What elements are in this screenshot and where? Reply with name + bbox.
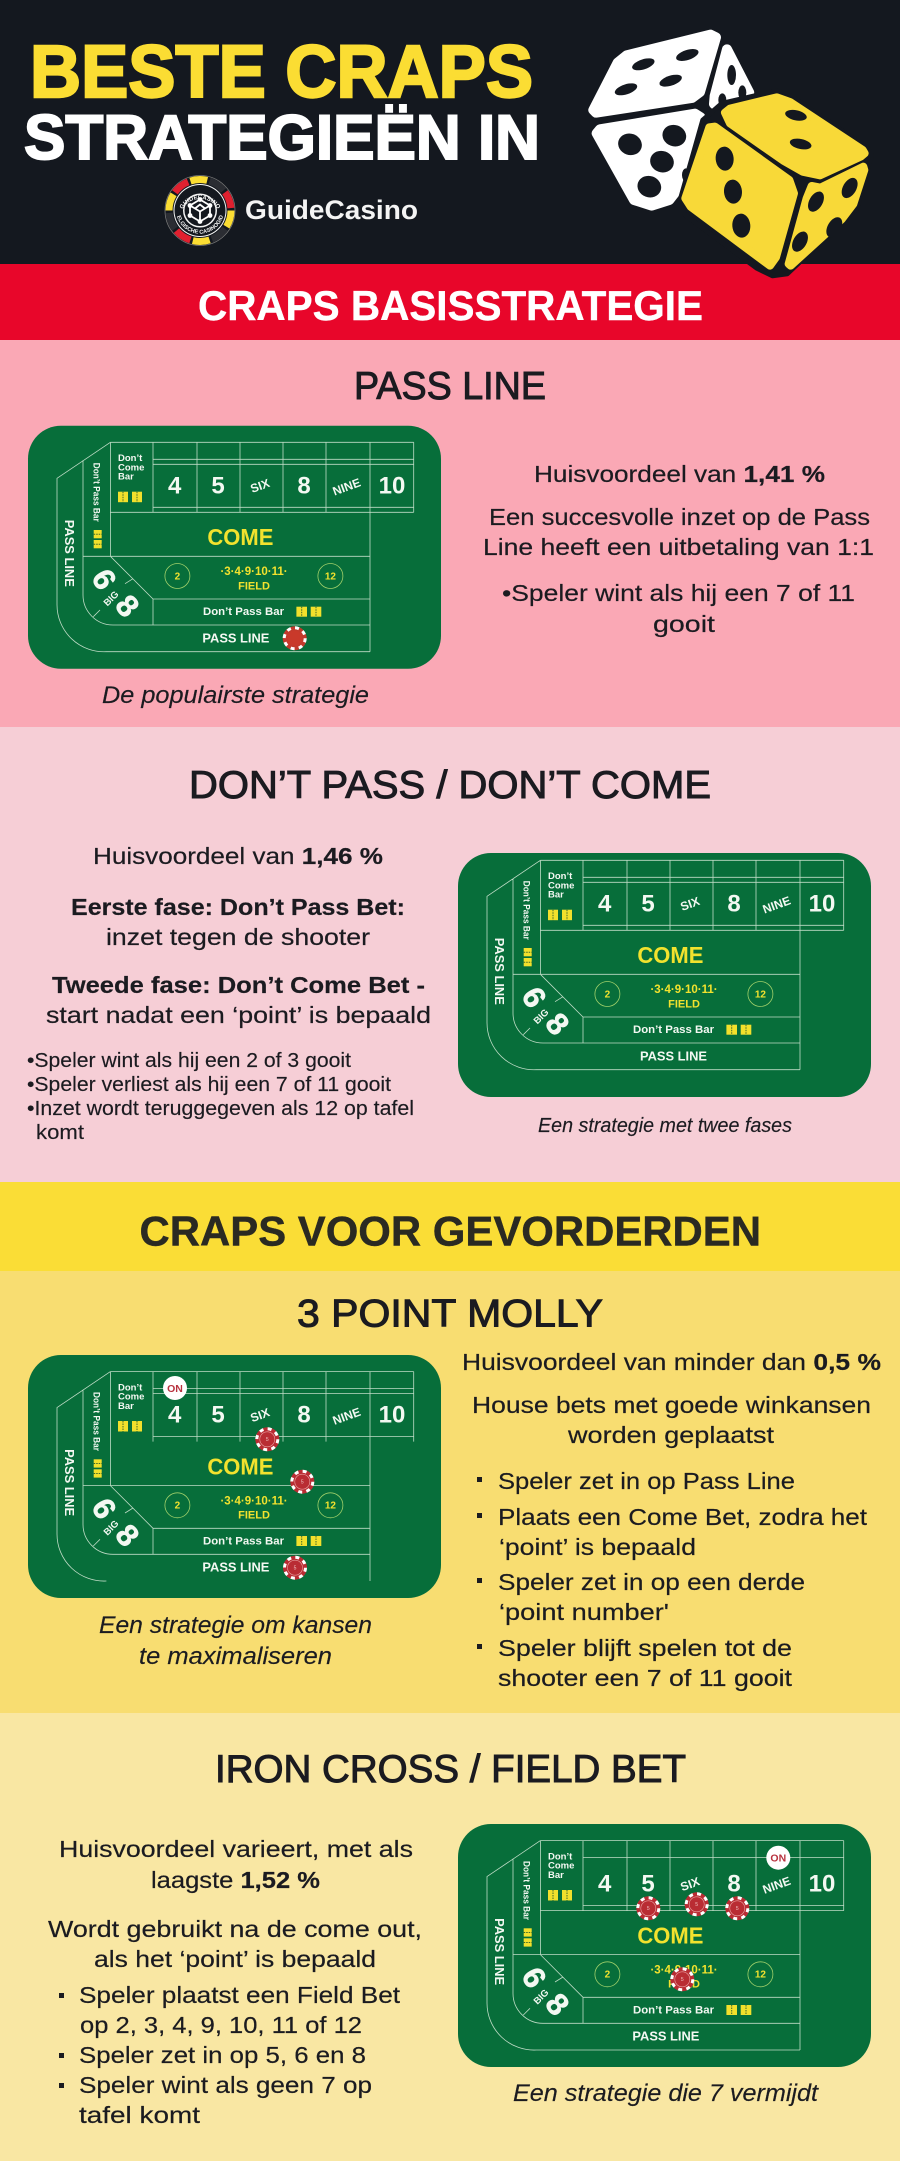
bet labels: ·3·4·9·10·11·	[650, 984, 718, 996]
title: STRATEGIEËN IN	[24, 103, 540, 173]
logo: GuideCasino chip and wordmark: GuideCasino	[245, 195, 418, 225]
bet labels: Don’t Pass Bar	[520, 1861, 532, 1920]
red banner background	[0, 264, 900, 340]
bet labels: Don’t	[548, 871, 573, 882]
bet labels: 6	[85, 563, 123, 596]
caption: een strategie om kansen te maximaliseren: Een strategie om kansen	[99, 1612, 372, 1639]
text: pass line details: •Speler wint als hij een 7 of 11	[502, 580, 855, 606]
bet labels: Bar	[118, 472, 134, 483]
craps table: don't pass	[458, 853, 871, 1097]
bet labels: NINE	[761, 1874, 792, 1897]
bet labels: COME	[207, 1453, 273, 1479]
bet labels: 6	[515, 981, 553, 1014]
text: pass line details	[483, 461, 874, 637]
bet labels: 8	[297, 1402, 311, 1429]
bet labels: FIELD	[238, 1510, 270, 1522]
text: don't pass details: •Inzet wordt teruggegeven als 12 op tafel	[27, 1097, 414, 1120]
bet labels: 12	[755, 989, 766, 1000]
bet labels	[492, 871, 835, 1063]
text: don't pass details: •Speler verliest als hij een 7 of 11 gooit	[27, 1073, 391, 1096]
bet labels: 5	[211, 1402, 225, 1429]
ON puck	[766, 1846, 790, 1870]
chip: field bet: 5	[681, 1977, 684, 1983]
chip: number 8: 5	[736, 1906, 739, 1912]
bet labels: Bar	[548, 890, 564, 901]
text: don't pass details: Eerste fase: Don’t Pass Bet:	[71, 894, 405, 920]
bet labels: PASS LINE	[640, 1048, 707, 1063]
chip: number 6	[685, 1892, 709, 1916]
chip: four/six bet: 5	[266, 1437, 269, 1443]
text: iron cross details	[48, 1836, 422, 2128]
bet labels: FIELD	[238, 580, 270, 592]
logo: GuideCasino chip and wordmark: BELGISCHE CASINOGIDS	[177, 215, 223, 234]
text: don't pass details: inzet tegen de shooter	[106, 924, 370, 950]
bet labels: PASS LINE	[492, 938, 507, 1005]
bet labels: BIG	[532, 1987, 551, 2007]
bet labels: 5	[211, 472, 225, 499]
bet labels: Don’t Pass Bar	[633, 2004, 715, 2016]
yellow banner background	[0, 1182, 900, 1271]
bet labels: 5	[641, 1871, 655, 1898]
bet labels: 10	[379, 472, 405, 499]
white die	[593, 35, 749, 206]
text: don't pass details: Tweede fase: Don’t Come Bet -	[52, 972, 425, 998]
bet labels: 2	[175, 1501, 181, 1512]
text: pass line details: Line heeft een uitbetaling van 1:1	[483, 534, 874, 560]
text: iron cross details: Speler wint als geen 7 op	[79, 2072, 372, 2098]
text: pass line details: gooit	[653, 611, 716, 637]
bet labels: SIX	[679, 1874, 702, 1894]
text: don't pass details	[27, 843, 431, 1144]
bet labels: 5	[641, 890, 655, 917]
bet labels: 2	[605, 989, 611, 1000]
chip: pass line	[283, 626, 307, 650]
text: iron cross details: Huisvoordeel varieert, met als	[59, 1836, 413, 1862]
bet labels: Bar	[118, 1401, 134, 1412]
bet labels: Come	[548, 880, 574, 891]
bet labels: Don’t Pass Bar	[90, 463, 102, 522]
chip: number 5: 5	[647, 1906, 650, 1912]
bet labels: Bar	[548, 1870, 564, 1881]
logo: GuideCasino chip and wordmark	[164, 175, 418, 246]
bet labels: Come	[118, 1392, 144, 1403]
caption: een strategie om kansen te maximaliseren: te maximaliseren	[139, 1643, 332, 1670]
bet labels: Don’t	[118, 1382, 143, 1393]
text: don't pass details: Huisvoordeel van 1,46 %	[93, 843, 383, 869]
small dice markers	[94, 1421, 321, 1546]
text: 3 point molly details: worden geplaatst	[567, 1422, 775, 1448]
bet labels: 8	[538, 1986, 576, 2022]
bet labels: PASS LINE	[62, 1449, 77, 1516]
bet labels	[492, 1851, 835, 2044]
panel background: don't pass	[0, 727, 900, 1182]
bet labels: COME	[207, 524, 273, 550]
small dice markers	[524, 910, 751, 1035]
bet labels: Don’t	[118, 453, 143, 464]
bet labels: PASS LINE	[492, 1918, 507, 1985]
bet labels: 6	[515, 1961, 553, 1994]
bet labels: Don’t Pass Bar	[203, 1535, 285, 1547]
ON puck: ON	[770, 1853, 786, 1865]
text: pass line details: Huisvoordeel van 1,41 %	[534, 461, 825, 487]
bet labels: 10	[809, 890, 835, 917]
text: 3 point molly details: ‘point’ is bepaald	[499, 1534, 696, 1560]
bet labels: COME	[637, 1922, 703, 1948]
bet labels: BIG	[532, 1007, 551, 1027]
bet labels: Don’t Pass Bar	[520, 881, 532, 940]
bet labels: BIG	[102, 589, 121, 609]
bet labels: Don’t	[548, 1851, 573, 1862]
panel background: iron cross	[0, 1713, 900, 2161]
bet labels: 8	[108, 1517, 146, 1553]
bet labels: ·3·4·9·10·11·	[650, 1964, 718, 1976]
title	[24, 30, 540, 173]
text: 3 point molly details: House bets met goede winkansen	[472, 1392, 871, 1418]
panel background: 3 point molly	[0, 1271, 900, 1713]
logo: GuideCasino chip and wordmark: GUIDECASINO	[180, 195, 220, 208]
text: don't pass details: start nadat een ‘point’ is bepaald	[46, 1002, 431, 1028]
bet labels: ·3·4·9·10·11·	[220, 1495, 288, 1507]
text: 3 point molly details: ‘point number'	[499, 1599, 669, 1625]
bet labels	[62, 453, 405, 645]
bet labels: Don’t Pass Bar	[90, 1392, 102, 1451]
text: 3 point molly details: Speler zet in op Pass Line	[498, 1468, 795, 1494]
text: iron cross details: Speler plaatst een Field Bet	[79, 1982, 401, 2008]
panel background: pass line	[0, 340, 900, 727]
chip: come bet: 5	[301, 1479, 304, 1485]
bet labels: FIELD	[668, 998, 700, 1010]
text: 3 point molly details: Speler blijft spelen tot de	[498, 1635, 792, 1661]
caption: een strategie met twee fases: Een strategie met twee fases	[538, 1115, 792, 1137]
heading: 3 point molly: 3 POINT MOLLY	[297, 1292, 603, 1336]
craps table: pass line	[28, 426, 441, 669]
heading: craps basisstrategie: CRAPS BASISSTRATEGIE	[198, 282, 703, 329]
text: iron cross details: als het ‘point’ is bepaald	[94, 1946, 376, 1972]
small dice markers	[94, 492, 321, 617]
small dice markers	[524, 1890, 751, 2015]
text: 3 point molly details: shooter een 7 of 11 gooit	[498, 1665, 793, 1691]
text: don't pass details: komt	[36, 1121, 84, 1144]
bet labels: 4	[168, 472, 182, 499]
chip: pass line: 5	[294, 1565, 297, 1571]
ON puck	[163, 1376, 187, 1400]
bet labels: SIX	[679, 894, 702, 914]
text: don't pass details: •Speler wint als hij een 2 of 3 gooit	[27, 1049, 351, 1072]
text: iron cross details: laagste 1,52 %	[151, 1867, 320, 1893]
bet labels: 12	[325, 1501, 336, 1512]
bet labels: 8	[727, 1871, 741, 1898]
bet labels: 4	[598, 890, 612, 917]
bet labels: 10	[809, 1871, 835, 1898]
title: BESTE CRAPS	[30, 30, 533, 113]
chip: number 6: 5	[695, 1902, 698, 1908]
icon: dice	[593, 35, 872, 276]
bet labels: 8	[108, 588, 146, 624]
bet labels: 10	[379, 1402, 405, 1429]
heading: don't pass: DON’T PASS / DON’T COME	[189, 764, 711, 807]
text: iron cross details: tafel komt	[79, 2102, 201, 2128]
table markings	[487, 860, 844, 1070]
text: iron cross details: Speler zet in op 5, 6 en 8	[79, 2042, 366, 2068]
text: 3 point molly details: Plaats een Come Bet, zodra het	[498, 1504, 868, 1530]
chip: number 5	[636, 1896, 660, 1920]
yellow die pips	[715, 108, 861, 255]
bet labels: 2	[605, 1970, 611, 1981]
bet labels: Come	[548, 1861, 574, 1872]
chip: pass line	[283, 1556, 307, 1580]
bet labels: 8	[727, 890, 741, 917]
bet labels: NINE	[761, 893, 792, 916]
white die pips	[613, 47, 746, 201]
bet labels: Don’t Pass Bar	[203, 606, 285, 618]
bet labels: NINE	[331, 1405, 362, 1428]
yellow die faces	[685, 97, 865, 266]
bet labels: 12	[325, 571, 336, 582]
ON puck: ON	[167, 1383, 183, 1395]
bet labels: COME	[637, 942, 703, 968]
chip: field bet	[670, 1967, 694, 1991]
bet labels: 8	[538, 1006, 576, 1042]
bet labels: 4	[598, 1871, 612, 1898]
bet labels: 6	[85, 1492, 123, 1525]
header background	[0, 0, 900, 264]
yellow die outline	[680, 91, 872, 276]
text: 3 point molly details: Huisvoordeel van minder dan 0,5 %	[462, 1349, 881, 1375]
text: iron cross details: op 2, 3, 4, 9, 10, 11 of 12	[80, 2012, 362, 2038]
bet labels: SIX	[249, 476, 272, 496]
bet labels: PASS LINE	[632, 2029, 700, 2044]
chip: come bet	[290, 1470, 314, 1494]
heading: iron cross: IRON CROSS / FIELD BET	[215, 1748, 686, 1791]
chip: number 8	[725, 1896, 749, 1920]
bet labels: Don’t Pass Bar	[633, 1024, 715, 1036]
heading: craps voor gevorderden: CRAPS VOOR GEVORDERDEN	[140, 1208, 761, 1254]
caption: een strategie die 7 vermijdt: Een strategie die 7 vermijdt	[513, 2080, 819, 2107]
text: iron cross details: Wordt gebruikt na de come out,	[48, 1916, 422, 1942]
bet labels: BIG	[102, 1518, 121, 1538]
craps table: iron cross	[458, 1824, 871, 2067]
bet labels	[62, 1382, 405, 1575]
bet labels: PASS LINE	[202, 630, 270, 645]
bet labels: PASS LINE	[62, 520, 77, 587]
bet labels: Come	[118, 462, 144, 473]
craps table: 3 point molly	[28, 1355, 441, 1598]
text: pass line details: Een succesvolle inzet op de Pass	[489, 504, 870, 530]
bet labels: 2	[175, 571, 181, 582]
bet labels: NINE	[331, 475, 362, 498]
heading: pass line: PASS LINE	[354, 365, 546, 408]
bet labels: 8	[297, 472, 311, 499]
caption: een strategie om kansen te maximaliseren	[99, 1612, 372, 1670]
bet labels: ·3·4·9·10·11·	[220, 566, 288, 578]
caption: de populairste strategie: De populairste strategie	[102, 682, 369, 709]
bet labels: FIELD	[668, 1979, 700, 1991]
text: 3 point molly details	[462, 1349, 881, 1691]
chip: four/six bet	[255, 1427, 279, 1451]
text: 3 point molly details: Speler zet in op een derde	[498, 1569, 805, 1595]
bet labels: SIX	[249, 1405, 272, 1425]
bet labels: PASS LINE	[202, 1560, 270, 1575]
bet labels: 12	[755, 1970, 766, 1981]
bet labels: 4	[168, 1402, 182, 1429]
